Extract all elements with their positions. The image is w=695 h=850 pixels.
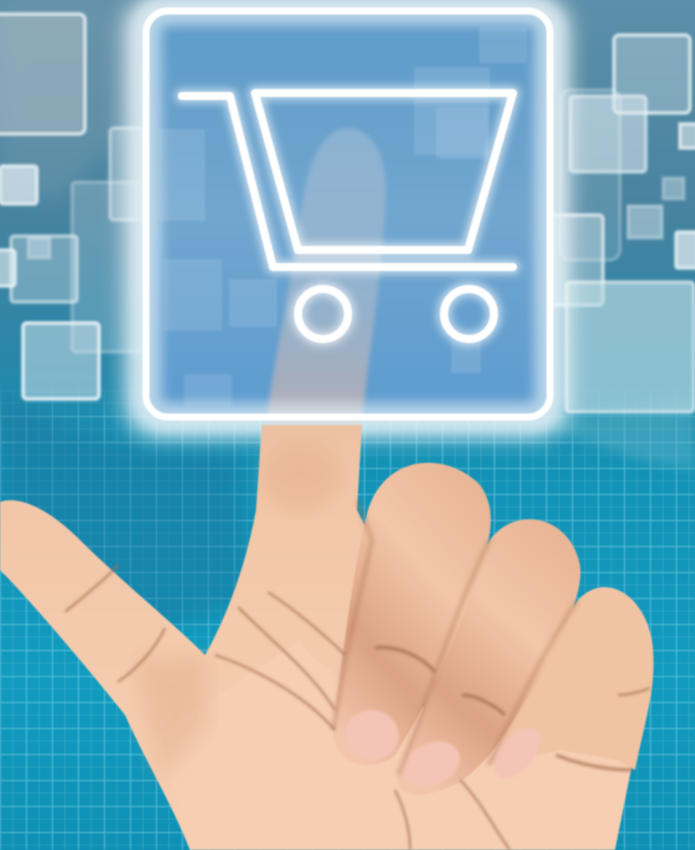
- floating tiles right: [513, 35, 695, 412]
- cart panel: [122, 0, 572, 440]
- lower hand: [150, 640, 645, 850]
- panel border: [146, 11, 550, 417]
- panel inner tiles: [160, 28, 526, 405]
- finger shadow edges: [333, 500, 578, 775]
- skin creases: [65, 565, 650, 850]
- thumb shadow: [135, 655, 210, 780]
- hand: [0, 425, 654, 850]
- hand palm, index finger and thumb: [0, 425, 400, 850]
- pinky finger: [488, 587, 654, 770]
- icon: shopping cart: [182, 93, 513, 339]
- middle finger: [333, 463, 491, 765]
- ring finger: [398, 519, 580, 795]
- floating tiles left: [0, 14, 202, 399]
- index shadow: [260, 443, 340, 513]
- fingernails: [339, 704, 549, 795]
- pale fingertip behind the glass: [266, 128, 386, 425]
